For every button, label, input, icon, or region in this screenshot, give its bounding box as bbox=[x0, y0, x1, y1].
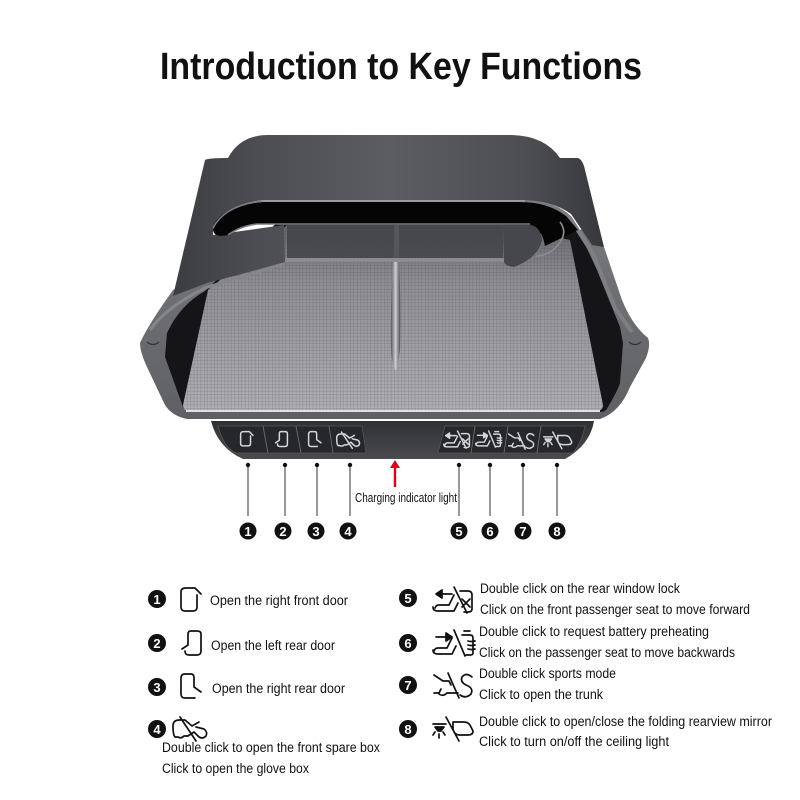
right inner bracket bbox=[503, 225, 542, 267]
marker numbers: 3 bbox=[312, 524, 320, 539]
cross rail bbox=[285, 258, 507, 262]
item 7 bbox=[399, 666, 616, 702]
bar body bbox=[211, 421, 594, 459]
item 7: Double click sports mode bbox=[479, 666, 616, 681]
marker numbers: 5 bbox=[455, 524, 463, 539]
marker numbers: 2 bbox=[279, 524, 287, 539]
item 4: 4 bbox=[153, 722, 161, 737]
red arrow: charging indicator bbox=[390, 460, 400, 487]
item 8: 8 bbox=[404, 722, 412, 737]
charging cable bbox=[536, 222, 564, 256]
marker numbers: 1 bbox=[244, 524, 252, 539]
item 8: Click to turn on/off the ceiling light bbox=[479, 734, 669, 749]
item 3: Open the right rear door bbox=[212, 681, 345, 696]
item 8 bbox=[399, 714, 772, 749]
button dividers bbox=[263, 426, 541, 453]
upper hood bbox=[173, 135, 604, 296]
item 1 bbox=[148, 588, 348, 611]
title: Introduction to Key Functions bbox=[160, 46, 642, 88]
item 1: Open the right front door bbox=[210, 593, 348, 608]
legend: left column bbox=[148, 588, 380, 776]
inner dark cavity bbox=[165, 215, 623, 412]
mat front edge highlight bbox=[186, 410, 600, 412]
marker circles bbox=[240, 522, 566, 540]
item 4: Double click to open the front spare box bbox=[162, 740, 380, 755]
panel icons bbox=[241, 431, 572, 449]
woven charging mat bbox=[183, 225, 603, 411]
right mounting clip bbox=[629, 342, 641, 344]
item 5: Double click on the rear window lock bbox=[480, 581, 680, 596]
slot rim highlights bbox=[213, 201, 566, 235]
item 2: Open the left rear door bbox=[211, 638, 335, 653]
item 4 bbox=[148, 717, 380, 776]
item 3: 3 bbox=[153, 680, 161, 695]
charging indicator label: Charging indicator light bbox=[355, 491, 457, 505]
centre fin bbox=[391, 258, 400, 371]
left mounting clip bbox=[147, 342, 159, 344]
item 6: Double click to request battery preheating bbox=[479, 624, 709, 639]
marker numbers bbox=[244, 524, 561, 539]
item 5: 5 bbox=[404, 591, 412, 606]
leader dots bbox=[246, 463, 559, 467]
item 5 bbox=[399, 581, 750, 617]
item 2: 2 bbox=[153, 636, 161, 651]
legend: right column bbox=[399, 581, 772, 749]
product photo: wireless charging tray bbox=[140, 135, 649, 419]
marker numbers: 6 bbox=[486, 524, 494, 539]
marker numbers: 7 bbox=[519, 524, 527, 539]
fin upper part bbox=[394, 225, 399, 258]
item 5: Click on the front passenger seat to move forward bbox=[480, 602, 750, 617]
item 7: 7 bbox=[404, 678, 412, 693]
rear wall shadow bbox=[287, 225, 503, 258]
item 7: Click to open the trunk bbox=[479, 687, 603, 702]
leader lines bbox=[248, 465, 557, 516]
item 6: Click on the passenger seat to move backwards bbox=[479, 645, 735, 660]
callout lines with numbered markers bbox=[240, 463, 566, 540]
item 2 bbox=[148, 631, 335, 655]
right sweep of rim bbox=[525, 201, 632, 332]
control bar bbox=[211, 421, 594, 459]
item 6 bbox=[399, 624, 735, 660]
right button group bbox=[438, 426, 585, 453]
tray outer rim bbox=[140, 225, 649, 419]
marker numbers: 8 bbox=[553, 524, 561, 539]
marker numbers: 4 bbox=[344, 524, 352, 539]
item 1: 1 bbox=[153, 592, 161, 607]
item 4: Click to open the glove box bbox=[162, 761, 309, 776]
item 6: 6 bbox=[404, 636, 412, 651]
left sweep of rim bbox=[150, 264, 283, 330]
black slot bbox=[213, 202, 578, 246]
item 8: Double click to open/close the folding rearview mirror bbox=[479, 714, 772, 729]
item 3 bbox=[148, 674, 345, 698]
left button group bbox=[218, 426, 366, 453]
